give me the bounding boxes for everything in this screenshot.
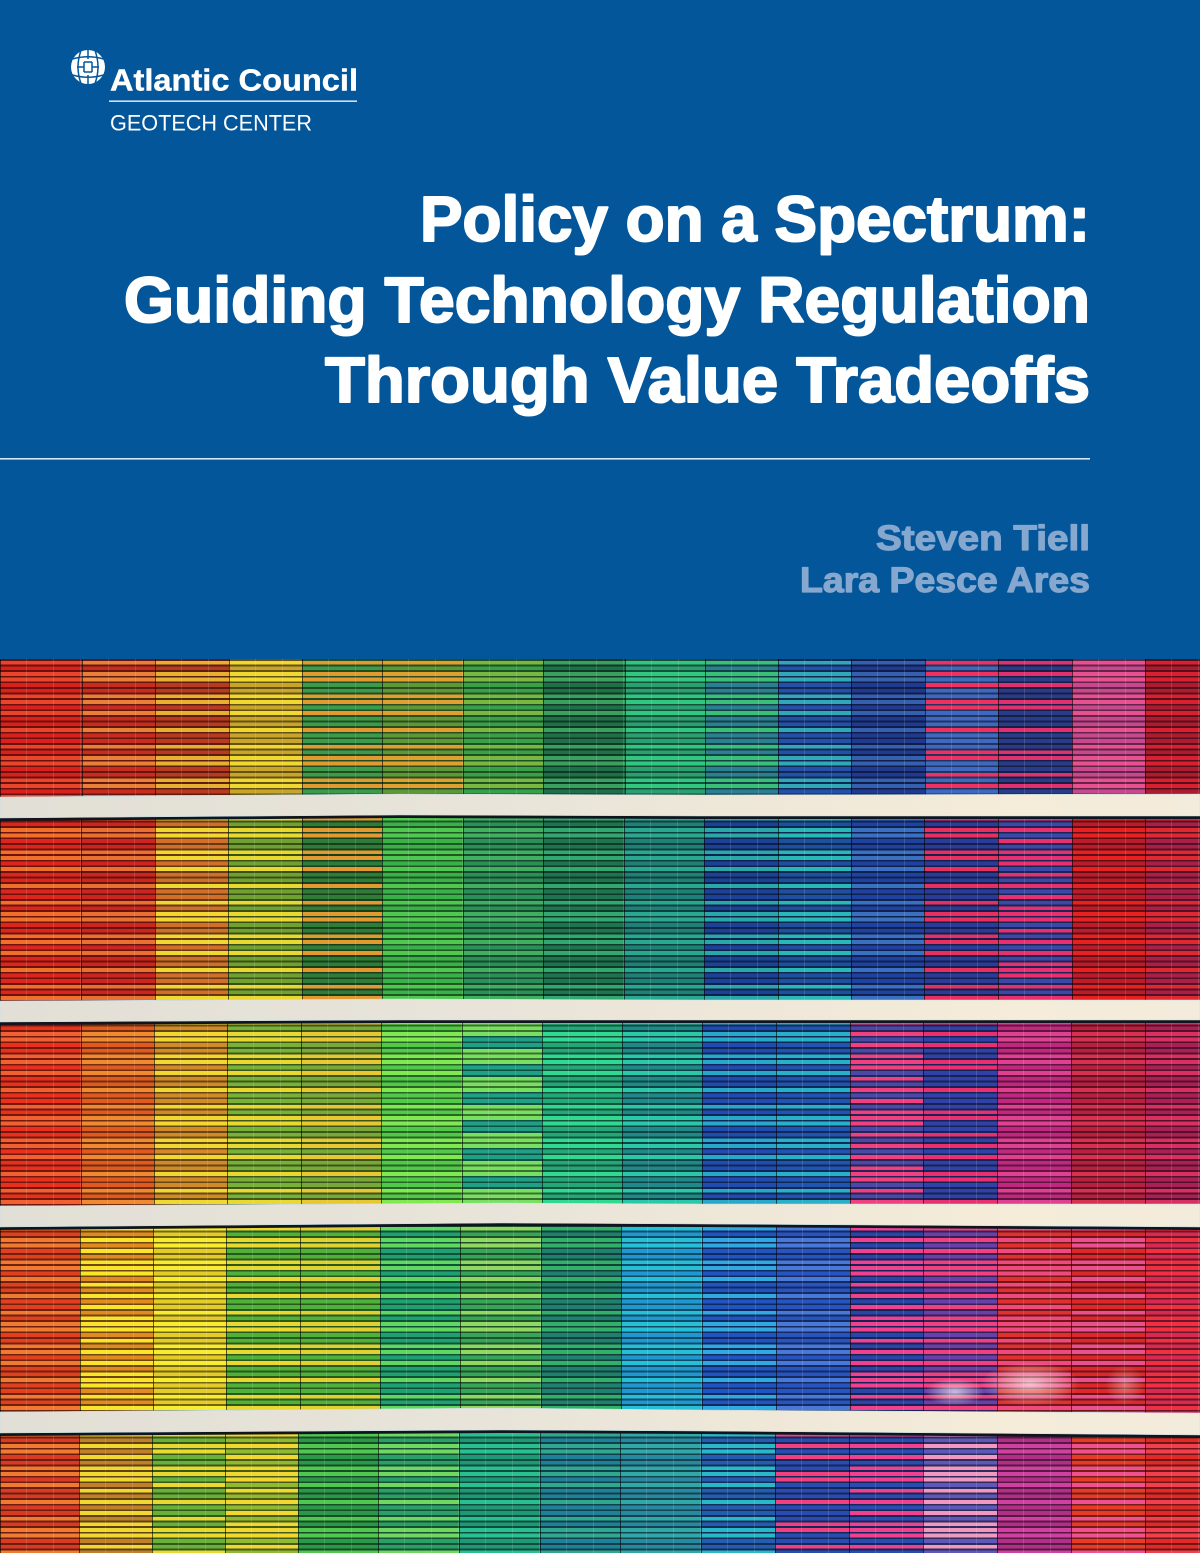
title rule [0, 458, 1090, 460]
photo: rainbow building facade with slatted blinds [0, 659, 1200, 1553]
subtitle: GEOTECH CENTER [110, 110, 312, 136]
wordmark: Atlantic Council [110, 62, 358, 98]
authors [800, 519, 1090, 600]
authors: Steven Tiell [876, 519, 1090, 558]
title: Policy on a Spectrum: [420, 183, 1090, 255]
icon: woven globe [71, 50, 105, 84]
concrete floor bands and window glare [0, 794, 1200, 1438]
logo: Atlantic Council Geotech Center [71, 50, 358, 136]
title: Through Value Tradeoffs [325, 344, 1090, 416]
facade row 1 [0, 659, 1200, 797]
facade row 2 [0, 818, 1200, 1001]
title: Guiding Technology Regulation [124, 264, 1090, 336]
facade row 4 [0, 1226, 1200, 1413]
title [124, 183, 1090, 416]
authors: Lara Pesce Ares [800, 561, 1090, 600]
header panel [0, 50, 1090, 600]
facade row 3 [0, 1023, 1200, 1206]
facade row 5 [0, 1433, 1200, 1553]
